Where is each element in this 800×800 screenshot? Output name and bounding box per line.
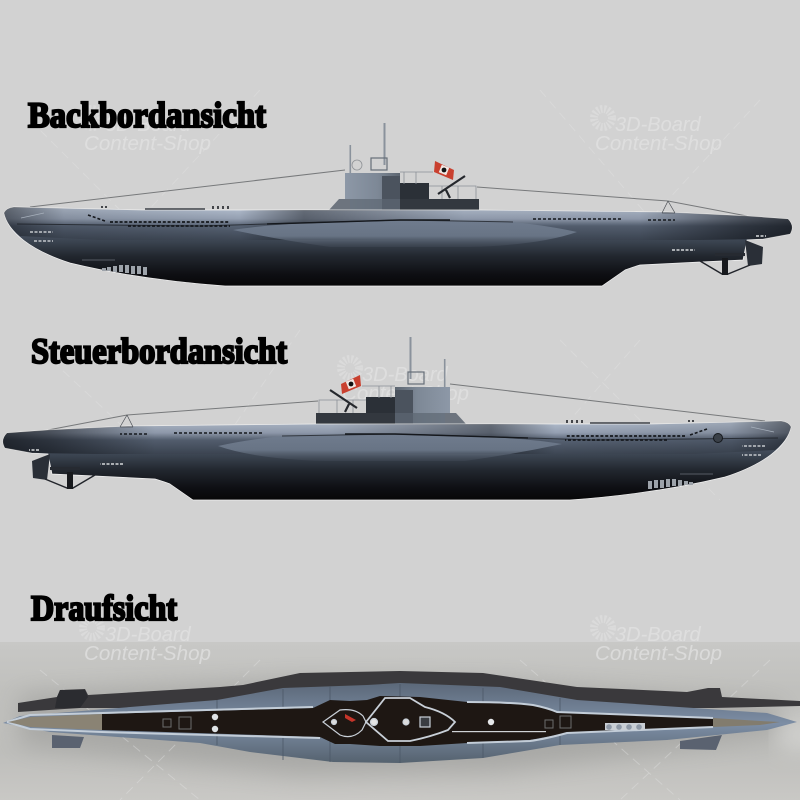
watermark: 3D-Board Content-Shop middle: 3D-Board (362, 364, 448, 386)
hull plating lines (217, 684, 560, 763)
panel: top view backdrop (0, 642, 800, 800)
hull shading (4, 207, 792, 240)
watermark: 3D-Board Content-Shop right lower (594, 619, 722, 665)
deck details and portholes (17, 201, 766, 260)
watermark: 3D-Board Content-Shop right upper: 3D-Board (615, 114, 701, 136)
flag (341, 375, 361, 394)
watermark: 3D-Board Content-Shop right upper (594, 109, 722, 155)
anti-aircraft gun (330, 390, 357, 412)
heading: Steuerbordansicht: Steuerbordansicht (31, 331, 287, 371)
submarine: starboard side view (3, 337, 791, 500)
lower hydroplane right (680, 735, 722, 750)
watermark: 3D-Board Content-Shop middle (341, 359, 469, 405)
silver deck edge (7, 702, 713, 743)
far-side rudder fin left (55, 690, 88, 708)
deck details and portholes (29, 415, 778, 474)
anti-aircraft gun (438, 176, 465, 198)
red flag from above (345, 714, 356, 722)
watermark: 3D-Board Content-Shop left upper (83, 109, 211, 155)
rudder and stern struts (32, 454, 95, 489)
wooden deck (102, 696, 713, 746)
watermark: 3D-Board Content-Shop right lower: Content-Shop (595, 643, 722, 665)
hull (3, 421, 791, 500)
conning tower (316, 386, 466, 430)
watermark: 3D-Board Content-Shop left upper: 3D-Board (105, 114, 191, 136)
heading: Draufsicht: Draufsicht (31, 588, 177, 628)
conning tower from above (323, 698, 455, 741)
watermark: 3D-Board Content-Shop left upper: Content-Shop (84, 133, 211, 155)
watermark: 3D-Board Content-Shop right upper: Content-Shop (595, 133, 722, 155)
watermark: 3D-Board Content-Shop right lower: 3D-Board (615, 624, 701, 646)
watermark: 3D-Board Content-Shop middle: Content-Shop (342, 383, 469, 405)
bow deck tan (713, 718, 780, 727)
antenna wires (48, 384, 765, 430)
antenna wires (30, 170, 747, 216)
hull shading (3, 421, 791, 454)
bow vent grille (102, 265, 147, 275)
far-side hull in shadow (18, 671, 800, 712)
deck hatches and mounts (163, 714, 645, 732)
stern deck tan (8, 714, 102, 730)
bow vent grille (648, 479, 693, 489)
flag (434, 161, 454, 180)
watermark: 3D-Board Content-Shop left lower: Content-Shop (84, 643, 211, 665)
pressure hull (3, 683, 797, 763)
watermark: 3D-Board Content-Shop left lower: 3D-Board (105, 624, 191, 646)
lower hydroplane left (52, 735, 84, 748)
periscopes and mast (408, 337, 446, 387)
saddle tank (218, 435, 562, 461)
hull (4, 207, 792, 286)
saddle tank (233, 221, 577, 247)
periscopes and mast (350, 123, 387, 173)
bow emblem (714, 434, 722, 442)
conning tower (329, 172, 479, 216)
watermark: 3D-Board Content-Shop left lower (83, 619, 211, 665)
heading: Backbordansicht: Backbordansicht (28, 95, 266, 135)
rudder and stern struts (700, 240, 763, 275)
submarine: port side view (4, 123, 792, 286)
submarine: top view (3, 671, 800, 763)
